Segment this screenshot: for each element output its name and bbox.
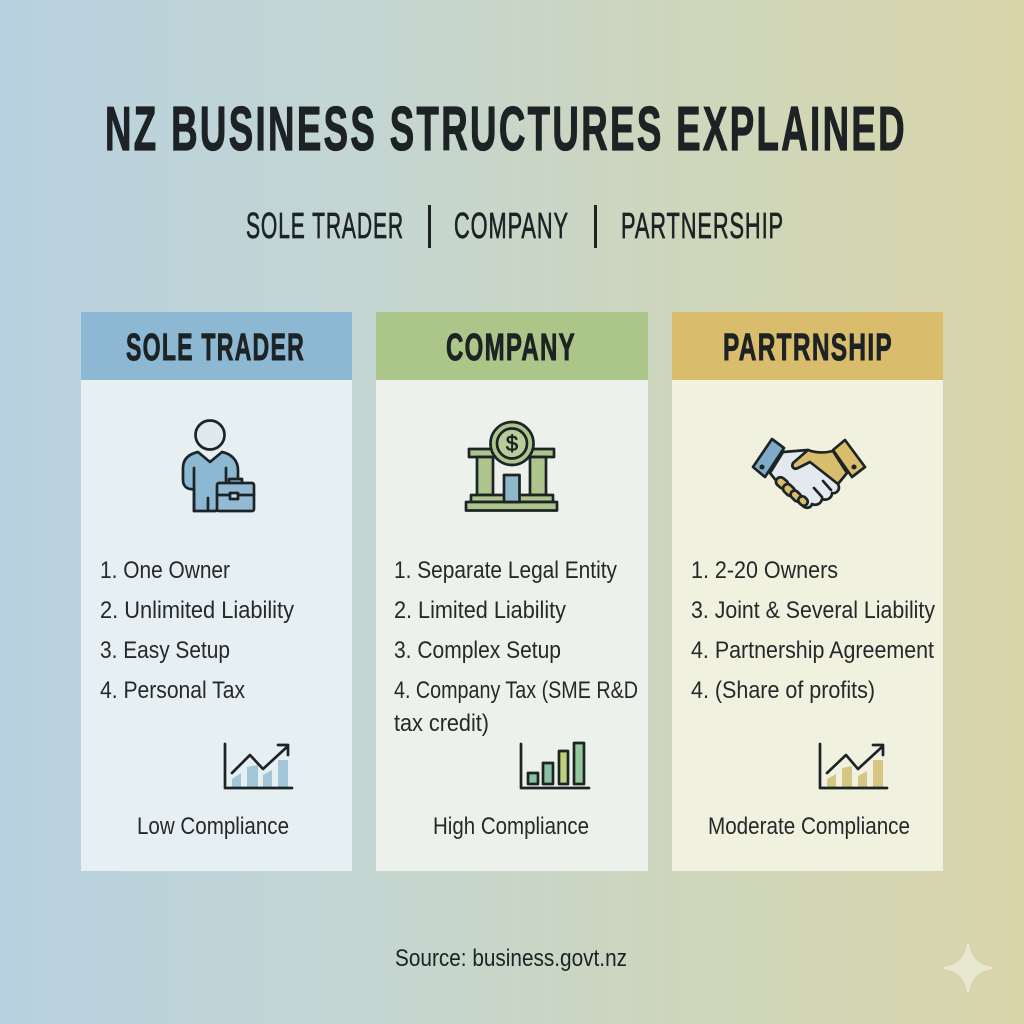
list: company: 2. Limited Liability: [394, 597, 566, 624]
icon: bank with dollar coin: [466, 422, 557, 510]
header: company: COMPANY: [446, 327, 576, 369]
list: sole trader: 1. One Owner: [100, 557, 230, 584]
header: sole trader: [81, 312, 352, 380]
list: sole trader: 3. Easy Setup: [100, 637, 230, 664]
list: partnership: 1. 2-20 Owners: [691, 557, 838, 584]
header: company: [376, 312, 648, 380]
header: sole trader: SOLE TRADER: [126, 327, 305, 369]
list: partnership: 4. (Share of profits): [691, 677, 875, 704]
list: partnership: 4. Partnership Agreement: [691, 637, 934, 664]
list: company: 1. Separate Legal Entity: [394, 557, 617, 584]
icon: low compliance chart: [225, 744, 292, 788]
list: sole trader: [100, 557, 294, 704]
icon: person with briefcase: [183, 420, 254, 511]
icon: high compliance chart: [521, 743, 589, 788]
list: company: 4. Company Tax (SME R&D: [394, 677, 638, 704]
list: company: [394, 557, 638, 737]
label: low compliance: Low Compliance: [137, 813, 289, 840]
list: sole trader: 4. Personal Tax: [100, 677, 245, 704]
icon: bank with dollar coin: $: [506, 431, 518, 456]
icon: moderate compliance chart: [820, 744, 887, 788]
label: moderate compliance: Moderate Compliance: [708, 813, 910, 840]
subtitle: PARTNERSHIP: [621, 205, 784, 246]
list: sole trader: 2. Unlimited Liability: [100, 597, 294, 624]
label: high compliance: High Compliance: [433, 813, 589, 840]
subtitle: [246, 205, 784, 248]
header: partnership: [672, 312, 943, 380]
panel: company: [376, 312, 648, 871]
header: partnership: PARTRNSHIP: [723, 327, 893, 369]
icon: sparkle: [944, 944, 992, 992]
panel: partnership: [672, 312, 943, 871]
list: company: tax credit): [394, 710, 489, 737]
list: company: 3. Complex Setup: [394, 637, 561, 664]
panel: sole trader: [81, 312, 352, 871]
icon: handshake: [753, 439, 865, 508]
list: partnership: [691, 557, 935, 704]
list: partnership: 3. Joint & Several Liability: [691, 597, 935, 624]
subtitle: SOLE TRADER: [246, 205, 404, 246]
source: Source: business.govt.nz: [395, 945, 627, 972]
subtitle: COMPANY: [454, 205, 569, 246]
